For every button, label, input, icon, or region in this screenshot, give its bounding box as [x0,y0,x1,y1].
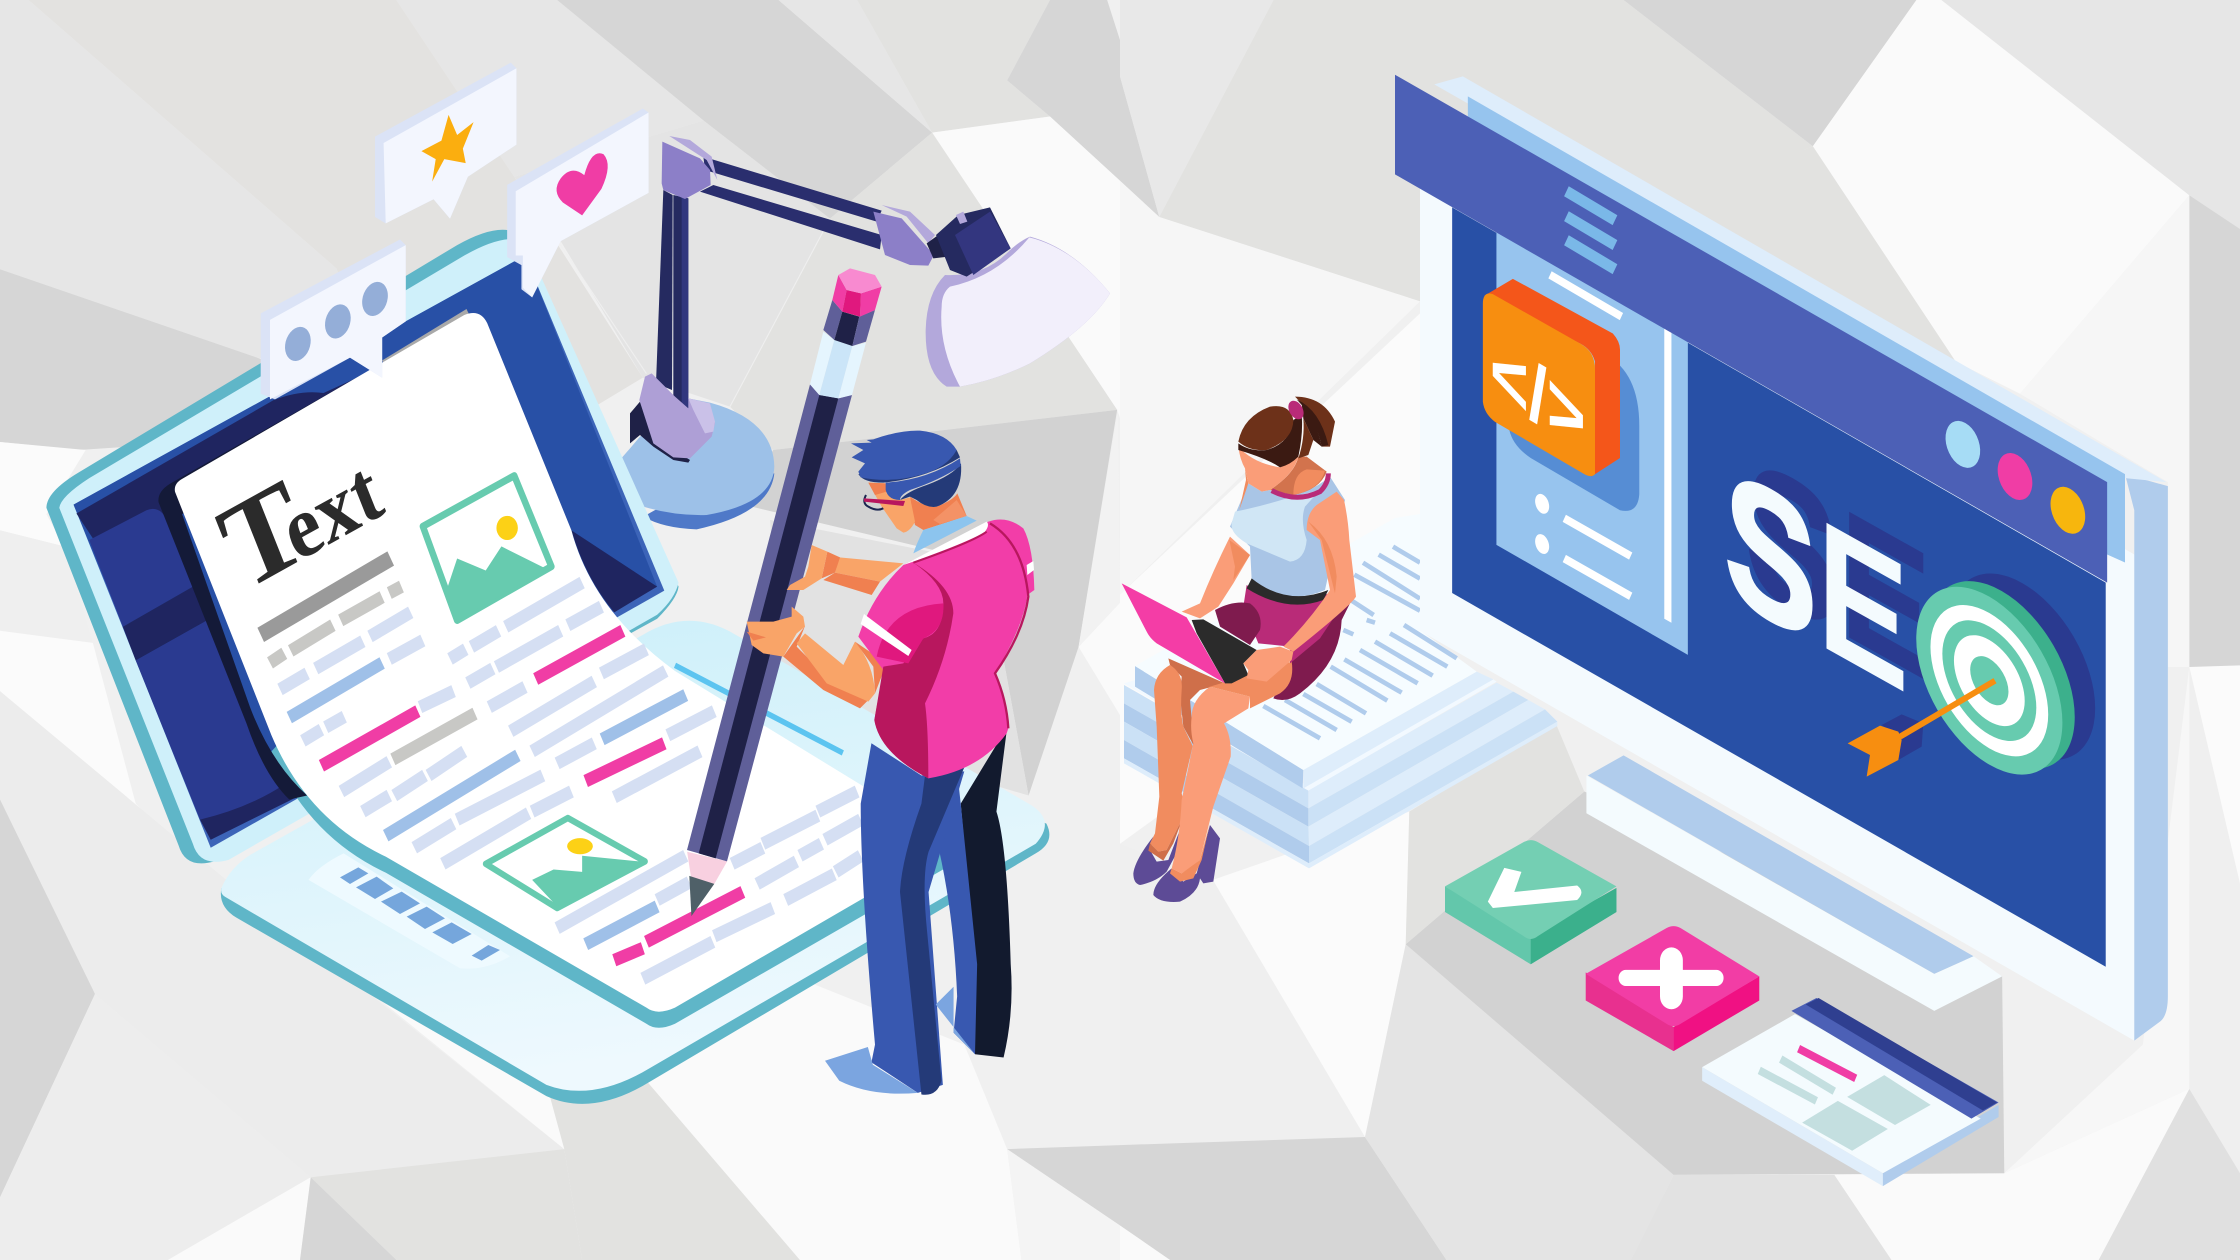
woman back leg [1148,665,1193,861]
woman front leg [1170,662,1292,882]
icon: star [421,115,474,182]
monitor body [1420,145,2134,1041]
pencil tip [687,852,727,916]
man legs [861,727,1012,1095]
left sidebar [1496,231,1688,655]
arrow [1848,681,1995,777]
giant pencil [687,268,882,916]
man far arm [787,545,903,595]
stack right side [1308,683,1557,868]
grey sheet edge [384,312,468,363]
man neck and face [868,483,967,533]
image thumbnail bottom [486,818,645,908]
heart speech bubble [507,108,649,297]
typing dots speech bubble [261,239,406,399]
man shirt [858,519,1034,778]
monitor side [2125,474,2168,1041]
monitor top edge [1434,76,2166,482]
SEO letters: S [1725,429,1816,684]
laptop screen [46,230,679,863]
desk lamp [597,136,1110,529]
second sheet edge [675,665,843,753]
keyboard keys [340,867,500,961]
monitor stand [1586,755,2002,1011]
heading: Text: Text [203,413,397,617]
stack text lines [1263,547,1457,738]
stack left side [1124,685,1309,868]
paper back shadow [158,371,371,800]
woman skirt back [1273,597,1353,700]
menu icon [1566,191,1615,269]
stack thin sheet [1124,679,1497,791]
woman hand [1243,647,1293,682]
woman skirt [1215,585,1337,663]
woman thigh shadow [1168,658,1225,746]
buttons and card [1445,840,1999,1186]
blue text rows [289,663,686,944]
image thumbnail top [423,476,551,620]
laptop base plate [221,621,1049,1104]
woman shoes [1133,803,1220,902]
grey text rows [261,558,475,759]
target icon [1916,542,2095,807]
code tile: </> [1490,319,1586,469]
woman with laptop [1122,397,1356,902]
pale blue text rows [280,583,861,979]
woman neck [1239,457,1328,510]
window buttons [1939,414,2092,541]
icon: heart [557,153,608,215]
woman lower body [1133,597,1353,902]
lamp base [597,398,774,529]
small document card [1702,998,1999,1186]
code tile [1483,279,1620,477]
woman upper body [1122,397,1356,683]
SEO letters: E [1840,468,1931,723]
woman laptop [1122,583,1257,683]
man near arm [747,607,887,708]
check button [1445,840,1616,964]
SEO letters: E [1817,479,1909,734]
woman arms [1182,492,1356,652]
man collar [913,516,977,553]
plus button [1586,926,1759,1051]
woman hair [1238,397,1335,467]
monitor [1395,75,2168,1041]
curled paper sheet [158,312,957,1028]
man shoes [825,987,975,1094]
monitor screen [1452,207,2106,967]
lamp posts [656,190,688,408]
paper page [175,313,957,1012]
paper stack [1124,514,1557,868]
lamp shade [926,237,1110,387]
lamp head [927,207,1011,277]
pencil upper body [687,268,882,861]
man with pencil [747,431,1034,1095]
lamp joint at head [873,205,935,266]
woman face [1238,447,1298,492]
star speech bubble [375,63,516,223]
paper edge teal [271,659,957,1028]
lamp clamp [630,373,715,463]
lamp arms [700,157,882,249]
man glasses [864,495,905,510]
SEO letters: S [1747,418,1838,673]
title bar [1395,75,2107,583]
SEO graphic [1725,418,2095,807]
man hair [851,431,961,507]
SEO letters [1725,418,1931,734]
stack top sheet [1135,514,1493,788]
man upper body [747,431,1034,778]
keyboard panel [309,853,510,969]
pink highlighted rows [321,631,743,960]
lamp joint at post [662,136,717,199]
woman torso [1230,477,1345,605]
